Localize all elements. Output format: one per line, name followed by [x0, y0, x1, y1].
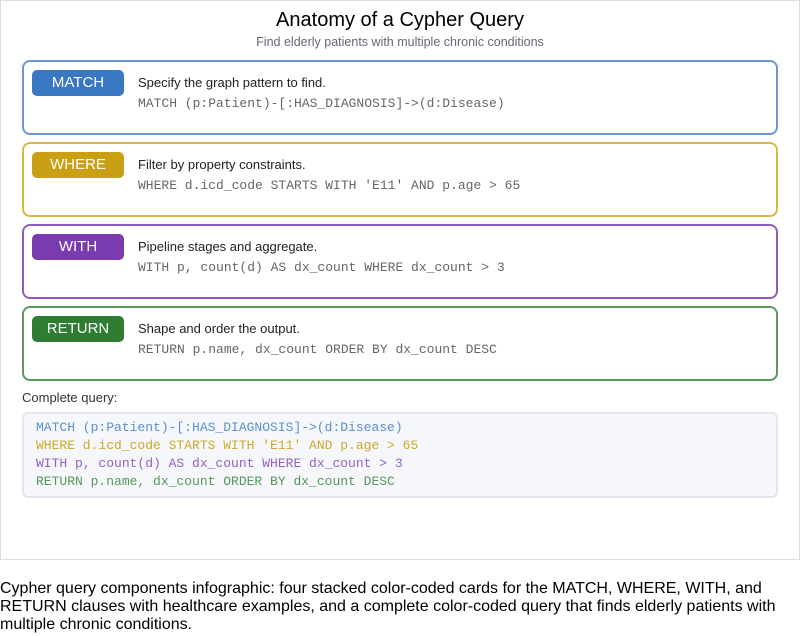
MATCH badge: MATCH [52, 74, 104, 91]
query line: RETURN: RETURN p.name, dx_count ORDER BY dx_count DESC [36, 474, 395, 489]
panel: complete query block [22, 412, 778, 498]
WITH code: WITH p, count(d) AS dx_count WHERE dx_count > 3 [138, 260, 505, 275]
WITH badge [32, 234, 124, 260]
query line: MATCH: MATCH (p:Patient)-[:HAS_DIAGNOSIS]->(d:Disease) [36, 420, 403, 435]
caption: multiple chronic conditions. [0, 616, 192, 633]
MATCH code: MATCH (p:Patient)-[:HAS_DIAGNOSIS]->(d:Disease) [138, 96, 505, 111]
RETURN code: RETURN p.name, dx_count ORDER BY dx_count DESC [138, 342, 497, 357]
subtitle: Find elderly patients with multiple chronic conditions [256, 35, 544, 49]
MATCH description: Specify the graph pattern to find. [138, 75, 326, 90]
WHERE description: Filter by property constraints. [138, 157, 306, 172]
panel: MATCH card [22, 60, 778, 135]
RETURN description: Shape and order the output. [138, 321, 300, 336]
WHERE badge: WHERE [50, 156, 106, 173]
title: Anatomy of a Cypher Query [276, 9, 524, 31]
caption [0, 580, 776, 633]
complete query label: Complete query: [22, 390, 117, 405]
WHERE code: WHERE d.icd_code STARTS WITH 'E11' AND p.age > 65 [138, 178, 520, 193]
query line: WHERE: WHERE d.icd_code STARTS WITH 'E11' AND p.age > 65 [36, 438, 418, 453]
WITH description: Pipeline stages and aggregate. [138, 239, 317, 254]
RETURN badge: RETURN [47, 320, 109, 337]
RETURN badge [32, 316, 124, 342]
caption: RETURN clauses with healthcare examples, and a complete color-coded query that finds elderly patients with [0, 598, 776, 615]
panel: WHERE card [22, 142, 778, 217]
WITH badge: WITH [59, 238, 97, 255]
WHERE badge [32, 152, 124, 178]
MATCH badge [32, 70, 124, 96]
query line: WITH: WITH p, count(d) AS dx_count WHERE dx_count > 3 [36, 456, 403, 471]
caption: Cypher query components infographic: four stacked color-coded cards for the MATCH, WHERE, WITH, and [0, 580, 762, 597]
panel: RETURN card [22, 306, 778, 381]
panel: WITH card [22, 224, 778, 299]
